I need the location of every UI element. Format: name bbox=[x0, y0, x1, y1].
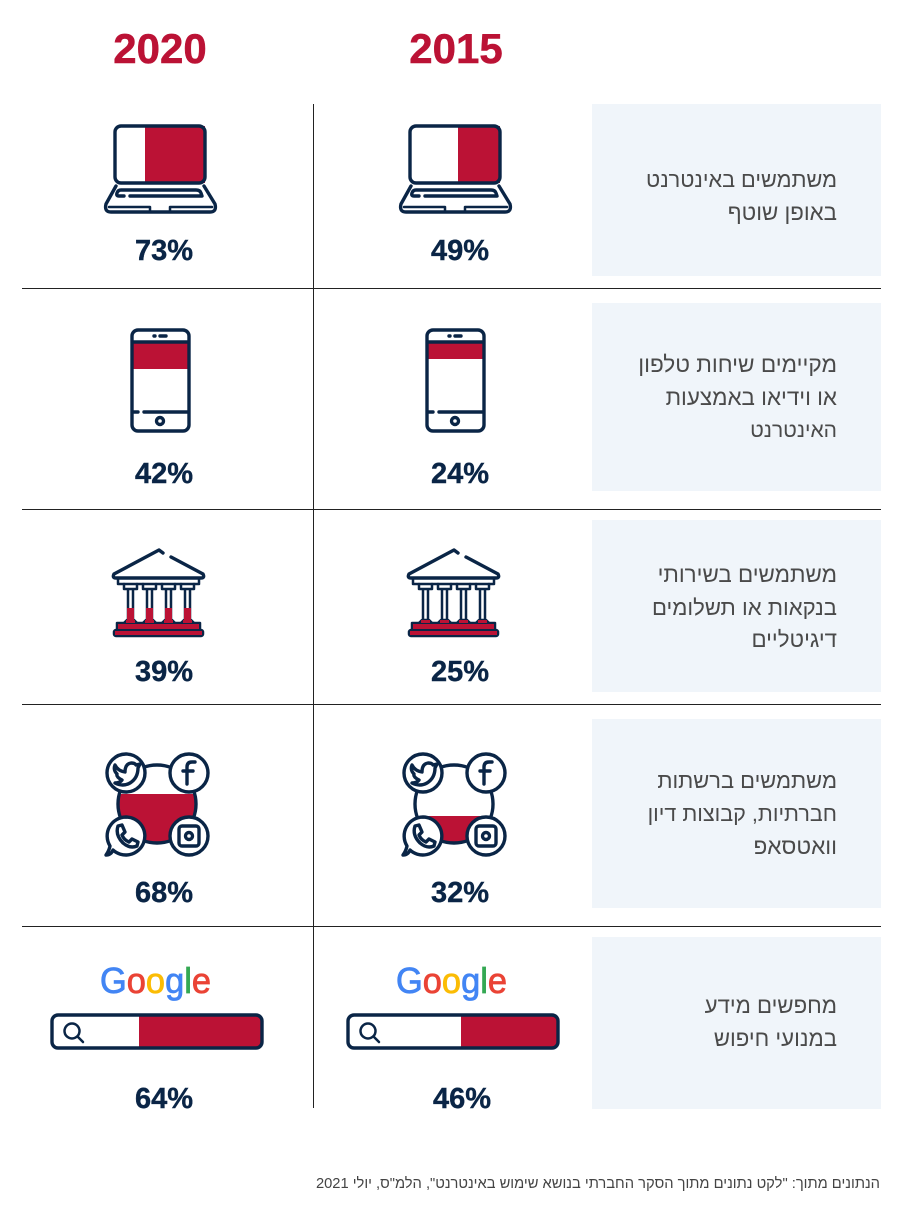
value: 32%: 32% bbox=[431, 877, 489, 909]
icon: social networks 68% bbox=[106, 754, 208, 855]
panel: phone and video calls: האינטרנט bbox=[750, 419, 837, 442]
icon: laptop 49% bbox=[401, 126, 510, 212]
icon: bank 39% bbox=[113, 550, 204, 636]
icon: social networks 32% bbox=[403, 754, 505, 855]
value: 42%: 42% bbox=[135, 458, 193, 490]
panel: social networks: משתמשים ברשתות bbox=[657, 768, 837, 793]
footer source note: הנתונים מתוך: "לקט נתונים מתוך הסקר החברתי בנושא שימוש באינטרנט", הלמ"ס, יולי 2021 bbox=[316, 1175, 880, 1192]
heading: 2015: 2015 bbox=[409, 25, 503, 72]
value: 49%: 49% bbox=[431, 235, 489, 267]
panel: search engines bbox=[592, 937, 881, 1109]
panel: banking services bbox=[592, 520, 881, 692]
icon: laptop 73% bbox=[106, 126, 215, 212]
icon: phone 24% bbox=[427, 330, 484, 431]
logo: Google 2015: Google bbox=[396, 960, 507, 1001]
value: 64%: 64% bbox=[135, 1083, 193, 1115]
panel: shared internet use: משתמשים באינטרנט bbox=[646, 167, 837, 192]
panel: shared internet use bbox=[592, 104, 881, 276]
table grid lines bbox=[22, 104, 881, 1108]
logo: Google 2020: Google bbox=[100, 960, 211, 1001]
panel: social networks: חברתיות, קבוצות דיון bbox=[648, 801, 837, 826]
panel: phone and video calls: מקיימים שיחות טלפון bbox=[638, 352, 837, 377]
panel: search engines: במנועי חיפוש bbox=[714, 1026, 837, 1051]
value: 68%: 68% bbox=[135, 877, 193, 909]
value: 73%: 73% bbox=[135, 235, 193, 267]
panel: shared internet use: באופן שוטף bbox=[728, 200, 837, 225]
icon: phone 42% bbox=[132, 330, 189, 431]
panel: banking services: בנקאות או תשלומים bbox=[652, 595, 837, 620]
panel: phone and video calls bbox=[592, 303, 881, 491]
panel: search engines: מחפשים מידע bbox=[705, 993, 837, 1018]
heading: 2020: 2020 bbox=[113, 25, 207, 72]
value: 25%: 25% bbox=[431, 656, 489, 688]
value: 39%: 39% bbox=[135, 656, 193, 688]
value: 46%: 46% bbox=[433, 1083, 491, 1115]
panel: social networks bbox=[592, 719, 881, 908]
icon: bank 25% bbox=[408, 550, 499, 636]
icon: search bar 46% bbox=[348, 1015, 558, 1048]
panel: banking services: משתמשים בשירותי bbox=[658, 562, 837, 587]
panel: phone and video calls: או וידיאו באמצעות bbox=[666, 385, 837, 410]
panel: banking services: דיגיטליים bbox=[751, 627, 837, 652]
icon: search bar 64% bbox=[52, 1015, 262, 1048]
value: 24%: 24% bbox=[431, 458, 489, 490]
panel: social networks: וואטסאפ bbox=[754, 834, 837, 859]
